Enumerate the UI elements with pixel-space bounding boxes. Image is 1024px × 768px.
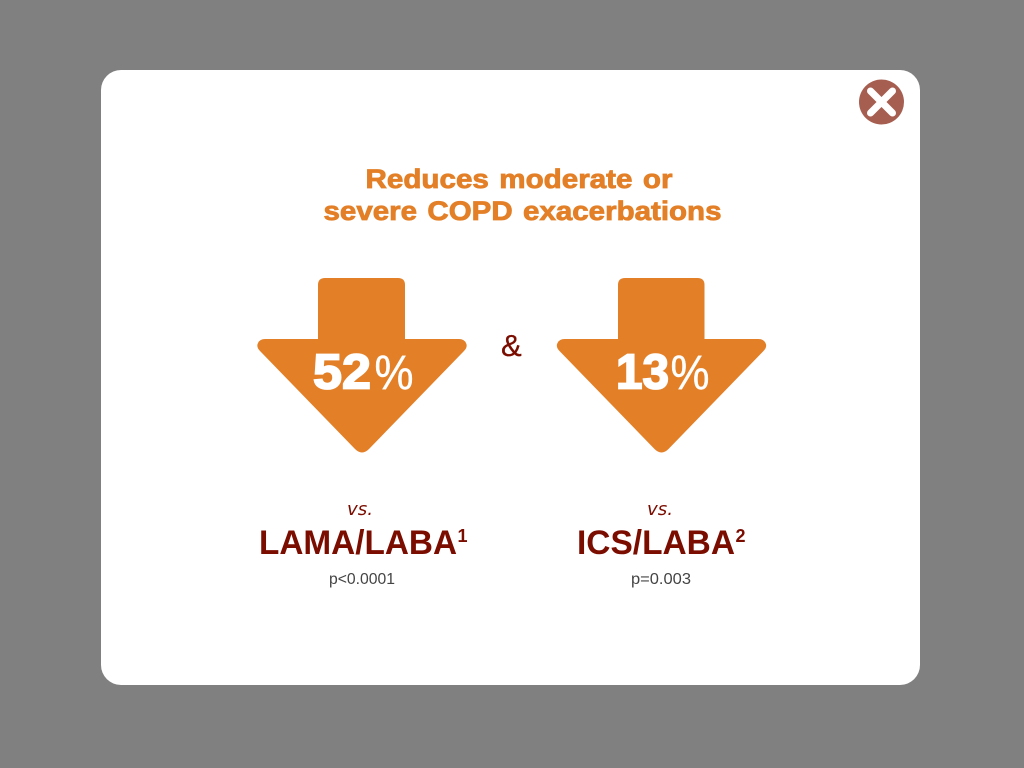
arrow: 52% reduction: % bbox=[374, 347, 414, 400]
comparator name: LAMA/LABA: 1 bbox=[458, 526, 468, 546]
title: severe COPD exacerbations bbox=[324, 196, 722, 226]
title: Reduces moderate or bbox=[366, 164, 673, 194]
arrow: 52% reduction bbox=[257, 278, 467, 452]
comparator name: ICS/LABA: 2 bbox=[736, 526, 746, 546]
left column: 52% vs LAMA/LABA bbox=[257, 278, 468, 588]
icon: close button bbox=[859, 80, 904, 124]
right column: 13% vs ICS/LABA bbox=[557, 278, 766, 588]
p value: p<0.0001 bbox=[329, 571, 395, 588]
ampersand: & bbox=[501, 328, 522, 363]
arrow: 13% reduction bbox=[557, 278, 766, 452]
comparator name: LAMA/LABA: LAMA/LABA bbox=[259, 524, 457, 562]
title bbox=[324, 164, 722, 226]
comparator: vs.: vs. bbox=[347, 499, 373, 520]
p value: p=0.003 bbox=[631, 571, 691, 588]
panel: modal card bbox=[101, 70, 920, 685]
arrow: 13% reduction: % bbox=[670, 347, 710, 400]
arrow: 13% reduction: 13 bbox=[616, 346, 669, 400]
arrow: 52% reduction: 52 bbox=[313, 346, 371, 400]
comparator: vs.: vs. bbox=[647, 499, 673, 520]
comparator name: ICS/LABA: ICS/LABA bbox=[577, 524, 735, 562]
